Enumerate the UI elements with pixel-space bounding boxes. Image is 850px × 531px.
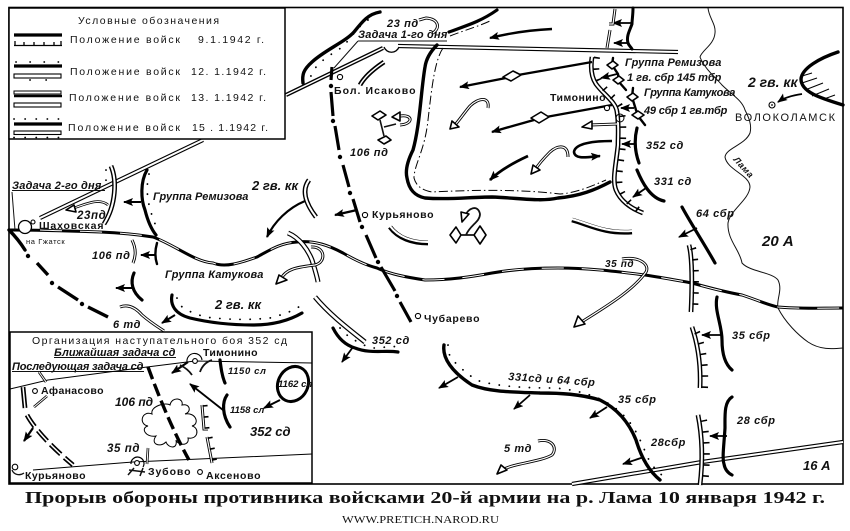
352 and 331 divisions bbox=[622, 128, 735, 263]
diamonds at Isakovo bbox=[372, 111, 410, 144]
label: 23 пд: 23 пд bbox=[386, 18, 419, 30]
2 guards cavalry corps and Volokolamsk bbox=[735, 52, 843, 124]
Kuryanovo inset bbox=[12, 464, 18, 470]
legend row 1 bbox=[14, 34, 264, 46]
group Katukova label bbox=[116, 269, 264, 300]
legend panel bbox=[9, 8, 285, 139]
6 тд bbox=[113, 306, 164, 331]
labels: Группа Ремизова bbox=[625, 57, 722, 69]
road top bbox=[286, 46, 678, 95]
front 331 сд и 64 сбр bbox=[439, 345, 686, 480]
352 and 331 divisions: 64 сбр bbox=[696, 208, 735, 220]
double dashed front bbox=[27, 415, 73, 465]
front 331 сд и 64 сбр: 35 сбр bbox=[618, 394, 657, 406]
label: task of day 1: Задача 1-го дня bbox=[358, 29, 448, 41]
inset title: Организация наступательного боя 352 сд bbox=[32, 335, 287, 347]
forest bbox=[142, 399, 197, 447]
2 guards cavalry corps and Volokolamsk: 2 гв. кк bbox=[747, 74, 798, 90]
crossing double lines bbox=[276, 233, 323, 284]
group Remizova top: 1 гв. сбр 145 тбр bbox=[627, 72, 722, 84]
legend row 2: 12. 1.1942 г. bbox=[191, 66, 266, 78]
Shakhovskaya: Задача 2-го дня bbox=[12, 180, 102, 192]
352 сд lower: 352 сд bbox=[372, 335, 410, 347]
inset panel: organization of attack of 352 division: 35 пд bbox=[107, 443, 140, 455]
6 тд: 6 тд bbox=[113, 319, 141, 331]
legend row 3: 13. 1.1942 г. bbox=[191, 92, 266, 104]
dash-dot west boundary bbox=[26, 254, 108, 317]
group Katukova label: Группа Катукова bbox=[165, 269, 264, 281]
right column defence lines bbox=[689, 245, 776, 485]
diamonds and arrow at bottom of loop bbox=[450, 208, 486, 244]
curved arrow bbox=[574, 141, 612, 157]
double arc bbox=[572, 220, 632, 232]
inset panel: organization of attack of 352 division bbox=[10, 332, 314, 483]
double arrow near 23 пд bbox=[419, 18, 437, 33]
inset lower boundary bbox=[33, 454, 312, 470]
Kuryanovo area bbox=[335, 209, 434, 243]
106 пд dash-dot boundary bbox=[329, 67, 411, 322]
Aksenovo bbox=[198, 470, 202, 474]
attack arrows center bbox=[450, 29, 632, 244]
enemy ticks bbox=[34, 372, 215, 464]
Afanasovo bbox=[33, 389, 37, 393]
Bol. Isakovo: Бол. Исаково bbox=[334, 85, 416, 97]
legend row 1: 9.1.1942 г. bbox=[198, 34, 264, 46]
legend row 2 bbox=[14, 62, 266, 80]
right column defence lines: 28 сбр bbox=[736, 415, 776, 427]
river Lama bbox=[700, 8, 843, 349]
road bottom right bbox=[572, 442, 843, 484]
label: 106 пд: 106 пд bbox=[350, 147, 389, 159]
inset panel: organization of attack of 352 division: 1158 сл bbox=[230, 405, 264, 416]
2 гв. кк south: 2 гв. кк bbox=[214, 297, 262, 312]
river label: Лама bbox=[731, 154, 756, 180]
legend row 3: Положение войск bbox=[69, 92, 180, 104]
legend title: Условные обозначения bbox=[78, 15, 219, 27]
double arrow A bbox=[454, 100, 488, 126]
Timonino settlement: Тимонино bbox=[550, 92, 606, 104]
follow-up task label: Последующая задача сд bbox=[12, 361, 144, 373]
Zubovo bbox=[131, 457, 144, 467]
inset panel: organization of attack of 352 division: Афанасово bbox=[41, 385, 104, 397]
right column defence lines: 35 сбр bbox=[732, 330, 771, 342]
2 гв. кк south bbox=[162, 295, 302, 325]
inset panel: organization of attack of 352 division: 1162 сл bbox=[278, 379, 312, 390]
106 пд west: 106 пд bbox=[92, 250, 131, 262]
352 сд lower bbox=[315, 297, 410, 362]
legend row 4: 15 . 1.1942 г. bbox=[192, 122, 268, 134]
legend row 2: Положение войск bbox=[70, 66, 180, 78]
front 331 сд и 64 сбр: 28сбр bbox=[650, 437, 686, 449]
road to Shakhovskaya bbox=[40, 140, 203, 218]
inset upper boundary bbox=[10, 361, 312, 389]
inset panel: organization of attack of 352 division: 106 пд bbox=[115, 395, 153, 409]
group Remizova top: 49 сбр 1 гв.тбр bbox=[643, 105, 728, 117]
Shakhovskaya: Шаховская bbox=[39, 220, 104, 232]
regiments: 1150 сл bbox=[228, 366, 266, 377]
group Remizova top bbox=[601, 8, 736, 125]
army labels: 20 А bbox=[761, 233, 794, 250]
35 пд arrow bbox=[574, 258, 647, 327]
inset panel: organization of attack of 352 division: Зубово bbox=[148, 466, 191, 478]
railway main line bbox=[10, 230, 843, 308]
inset panel: organization of attack of 352 division: 352 сд bbox=[250, 424, 291, 439]
inset panel: organization of attack of 352 division: Аксеново bbox=[206, 470, 261, 482]
legend row 3 bbox=[14, 91, 266, 107]
Timonino label: Тимонино bbox=[203, 347, 258, 359]
5 тд arrow: 5 тд bbox=[504, 443, 532, 455]
5 тд arrow bbox=[497, 440, 554, 474]
Shakhovskaya: 23пд bbox=[76, 210, 106, 222]
dashed 106 пд line bbox=[148, 367, 189, 460]
front 331 сд и 64 сбр: 331сд и 64 сбр bbox=[508, 371, 596, 389]
source url: WWW.PRETICH.NAROD.RU bbox=[342, 514, 499, 526]
2 guards cavalry corps and Volokolamsk: ВОЛОКОЛАМСК bbox=[735, 112, 836, 124]
Bol. Isakovo bbox=[334, 62, 416, 97]
double arrow at Timonino bbox=[590, 124, 617, 125]
Kuryanovo area: Курьяново bbox=[372, 209, 434, 221]
nearest task label: Ближайшая задача сд bbox=[54, 347, 176, 359]
106 пд west bbox=[92, 240, 157, 264]
35 пд arrow: 35 пд bbox=[605, 259, 634, 270]
central loop front bbox=[406, 45, 610, 200]
2 гв. кк center bbox=[251, 178, 316, 237]
main title: Прорыв обороны противника войсками 20-й армии на р. Лама 10 января 1942 г. bbox=[25, 488, 825, 507]
double arrow B bbox=[535, 147, 568, 170]
army labels: 16 А bbox=[803, 458, 830, 473]
enemy line Timonino bbox=[591, 57, 643, 213]
Shakhovskaya: на Гжатск bbox=[26, 237, 65, 246]
army labels bbox=[761, 233, 830, 473]
2 гв. кк center: 2 гв. кк bbox=[251, 178, 299, 193]
front segment bbox=[449, 10, 497, 32]
Chubarevo: Чубарево bbox=[424, 313, 480, 325]
352 and 331 divisions: 352 сд bbox=[646, 140, 684, 152]
Timonino settlement bbox=[550, 92, 624, 122]
Shakhovskaya bbox=[9, 166, 115, 250]
Timonino position bbox=[172, 353, 225, 383]
legend row 4 bbox=[14, 119, 268, 138]
task of day 1 line bbox=[303, 10, 497, 83]
group Remizova west bbox=[124, 170, 249, 235]
352 and 331 divisions: 331 сд bbox=[654, 176, 692, 188]
inset panel: organization of attack of 352 division: Курьяново bbox=[25, 470, 86, 482]
legend row 1: Положение войск bbox=[70, 34, 180, 46]
group Remizova top: Группа Катукова bbox=[644, 87, 736, 99]
group Remizova west: Группа Ремизова bbox=[153, 191, 249, 203]
legend row 4: Положение войск bbox=[68, 122, 180, 134]
